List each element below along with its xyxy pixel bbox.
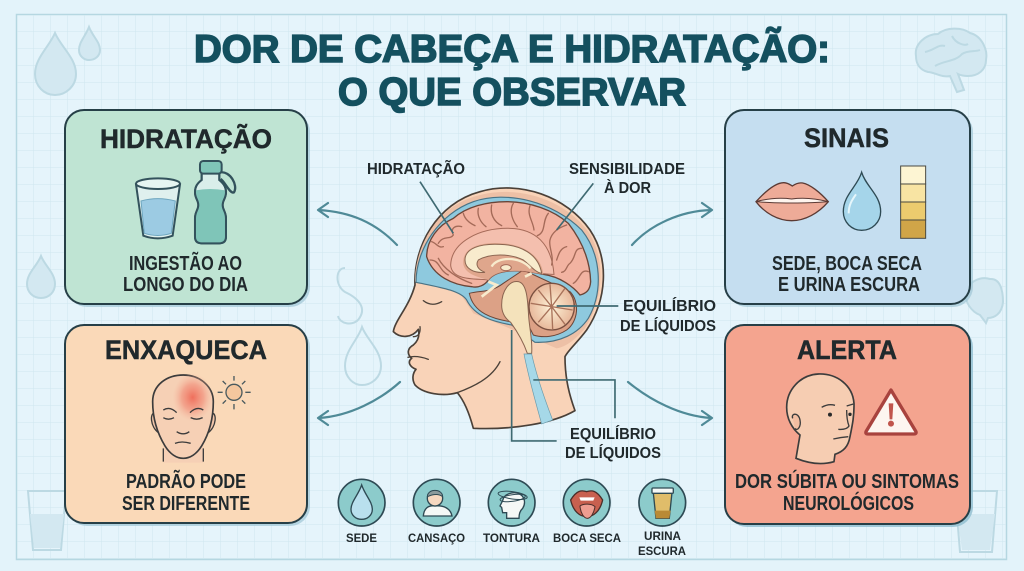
central labels: DE LÍQUIDOS	[620, 318, 716, 335]
icon: urine colour scale	[901, 166, 926, 238]
central labels	[367, 160, 716, 462]
panel: hidratação	[65, 110, 310, 307]
corpus callosum	[465, 244, 542, 273]
icon labels: BOCA SECA	[553, 531, 621, 545]
text: dor súbita: NEUROLÓGICOS	[783, 491, 914, 515]
lower brain	[469, 270, 577, 337]
heading: sinais: SINAIS	[804, 123, 889, 153]
central labels: EQUILÍBRIO	[570, 426, 656, 443]
icon: water bottle	[195, 161, 235, 243]
panel: enxaqueca	[65, 325, 310, 526]
icon row: symptoms	[338, 479, 686, 558]
heading: enxaqueca: ENXAQUECA	[105, 335, 267, 365]
text: ingestão	[123, 252, 248, 296]
icon: warning triangle	[866, 390, 916, 434]
spinal cord	[524, 354, 553, 424]
icon: head profile	[787, 374, 854, 464]
icon: head with migraine	[151, 373, 215, 463]
text: sede boca seca	[772, 253, 922, 296]
icon labels: URINA	[644, 529, 681, 543]
head silhouette	[393, 188, 603, 429]
icon: urina escura	[639, 479, 686, 526]
brainstem	[502, 281, 532, 353]
heading: hidratação: HIDRATAÇÃO	[100, 123, 272, 154]
icon: cansaço	[413, 479, 460, 526]
central labels: À DOR	[604, 180, 651, 197]
face details	[408, 301, 500, 393]
central labels: DE LÍQUIDOS	[565, 445, 661, 462]
brain group	[416, 197, 598, 353]
text: dor súbita	[735, 469, 959, 515]
icon labels: SEDE	[346, 531, 377, 545]
icon: water drop	[843, 172, 881, 230]
icon labels: TONTURA	[483, 531, 540, 545]
icon: sede	[338, 479, 385, 526]
icon: boca seca	[563, 479, 610, 526]
central labels: EQUILÍBRIO	[623, 298, 716, 315]
cerebrospinal fluid	[416, 197, 598, 342]
arrows	[318, 203, 712, 425]
cerebellum	[529, 283, 574, 330]
scalp band	[415, 192, 601, 348]
brain folds	[430, 203, 588, 283]
text: padrão: SER DIFERENTE	[122, 493, 250, 515]
icon: sun	[218, 376, 251, 409]
leader lines	[420, 182, 618, 441]
text: padrão	[122, 470, 250, 515]
brain cerebrum	[427, 202, 591, 295]
central labels: SENSIBILIDADE	[569, 161, 685, 178]
panel: sinais	[725, 110, 973, 307]
inner brain core	[451, 228, 554, 280]
icon labels: ESCURA	[638, 544, 686, 558]
title	[194, 27, 830, 114]
text: sede boca seca: SEDE, BOCA SECA	[772, 253, 922, 275]
text: dor súbita: DOR SÚBITA OU SINTOMAS	[735, 469, 959, 493]
title: DOR DE CABEÇA E HIDRATAÇÃO:	[194, 27, 830, 71]
icon: lips	[756, 183, 828, 221]
text: sede boca seca: E URINA ESCURA	[778, 274, 920, 296]
text: ingestão: INGESTÃO AO	[129, 252, 242, 275]
heading: alerta: ALERTA	[797, 335, 897, 365]
icon labels	[346, 529, 686, 558]
text: ingestão: LONGO DO DIA	[123, 274, 248, 296]
text: padrão: PADRÃO PODE	[126, 470, 246, 493]
icon labels: CANSAÇO	[408, 531, 465, 545]
central head illustration	[393, 188, 603, 429]
central labels: HIDRATAÇÃO	[367, 160, 465, 178]
panel: alerta	[725, 325, 973, 527]
icon: tontura	[488, 479, 535, 526]
thalamus	[492, 259, 531, 268]
title: O QUE OBSERVAR	[338, 71, 686, 114]
icon: glass of water	[136, 178, 180, 238]
